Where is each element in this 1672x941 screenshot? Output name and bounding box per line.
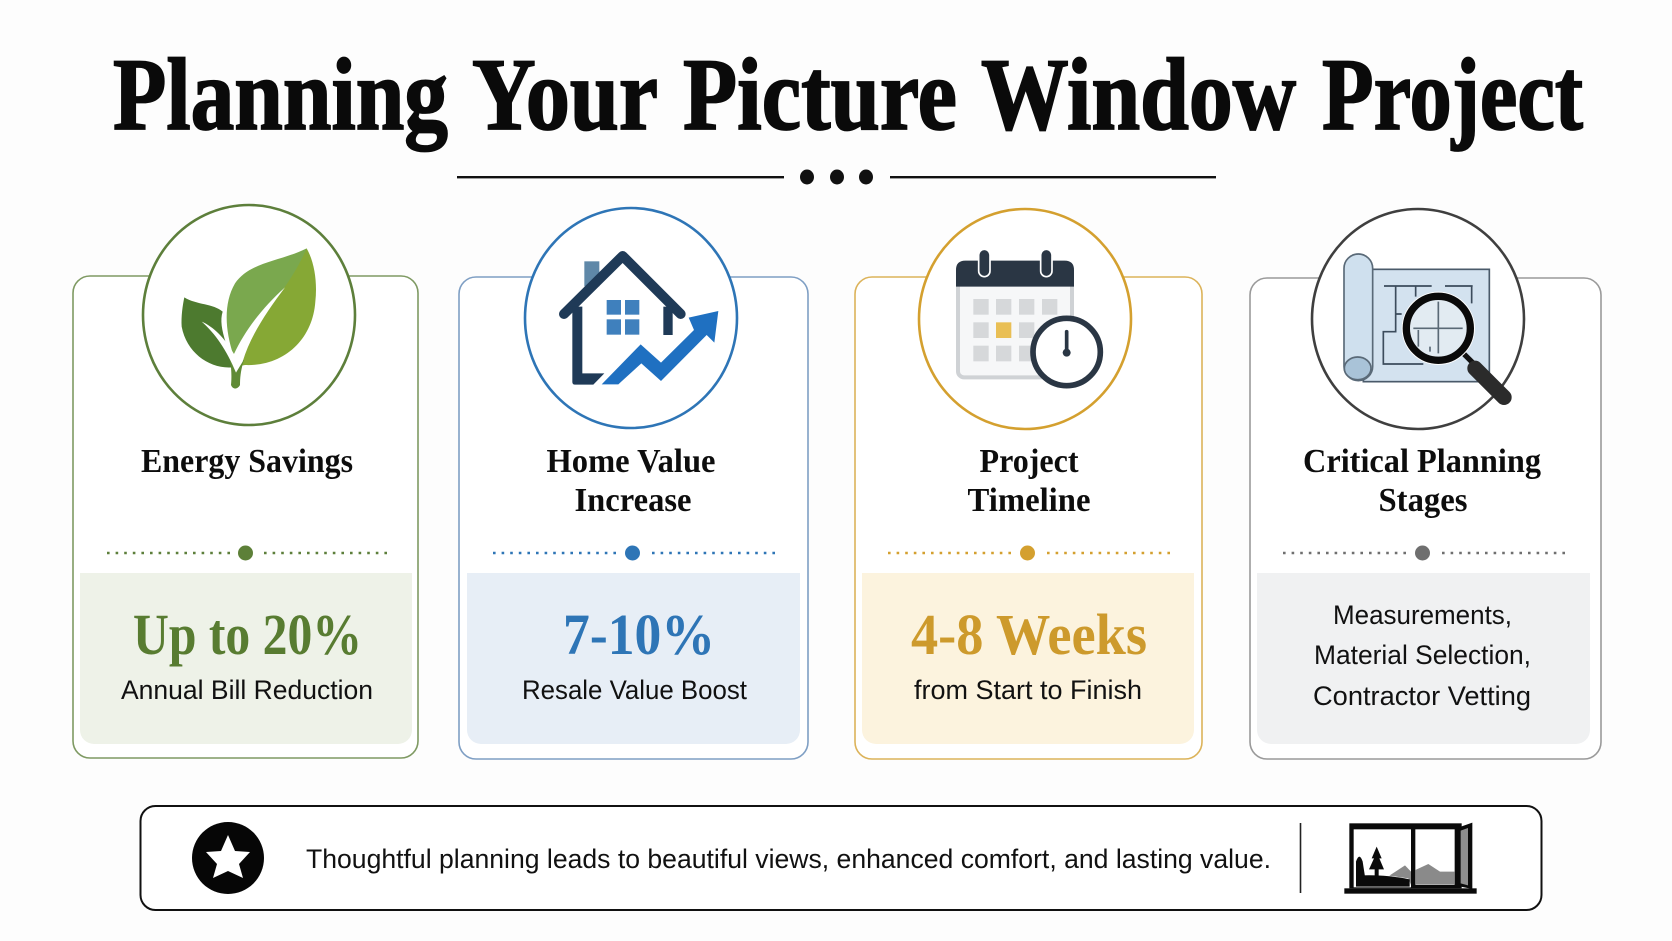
divider [493,546,776,560]
icon: house with rising arrow [525,208,737,428]
heading [968,443,1090,519]
heading: Project [980,443,1079,480]
icon: picture window [1344,823,1477,894]
title [113,38,1583,152]
stat box: from Start to Finish [914,675,1142,705]
heading: Timeline [968,482,1090,519]
divider [107,546,388,560]
stat box [862,573,1194,744]
heading: Critical Planning [1303,443,1541,480]
panel: home value increase [459,208,808,759]
stat box: 4-8 Weeks [911,602,1147,667]
icon: blueprint with magnifier [1312,209,1524,429]
panel: critical planning stages [1250,209,1601,759]
stat box: 7-10% [563,602,715,667]
heading: Increase [574,482,692,519]
stat box: Material Selection, [1314,640,1531,670]
divider [1283,546,1566,560]
heading [1303,443,1541,519]
heading [546,443,716,519]
stat box: Measurements, [1333,600,1512,630]
stat box [467,573,800,744]
icon: star badge [192,822,264,894]
title: Project [1322,38,1583,152]
divider [888,546,1171,560]
heading: Home Value [546,443,716,480]
panel: energy savings [73,205,418,758]
title divider [457,170,1216,184]
callout text: Thoughtful planning leads to beautiful views, enhanced comfort, and lasting value. [306,844,1271,874]
separator [1300,823,1302,893]
stat box: Annual Bill Reduction [121,675,373,705]
heading: Stages [1378,482,1468,519]
callout banner [140,806,1542,910]
stat box [80,573,412,744]
icon: calendar with clock [919,209,1131,429]
title: Planning [113,38,448,152]
stat box: Contractor Vetting [1313,681,1531,711]
stat box [1257,573,1590,744]
icon: leaf in circle [143,205,355,425]
title: Picture [683,38,957,152]
stat box: Resale Value Boost [522,675,747,705]
stat box: Up to 20% [133,602,362,667]
title: Your [472,38,658,152]
title: Window [981,38,1296,152]
panel: project timeline [855,209,1202,759]
heading: Energy Savings [141,443,353,480]
